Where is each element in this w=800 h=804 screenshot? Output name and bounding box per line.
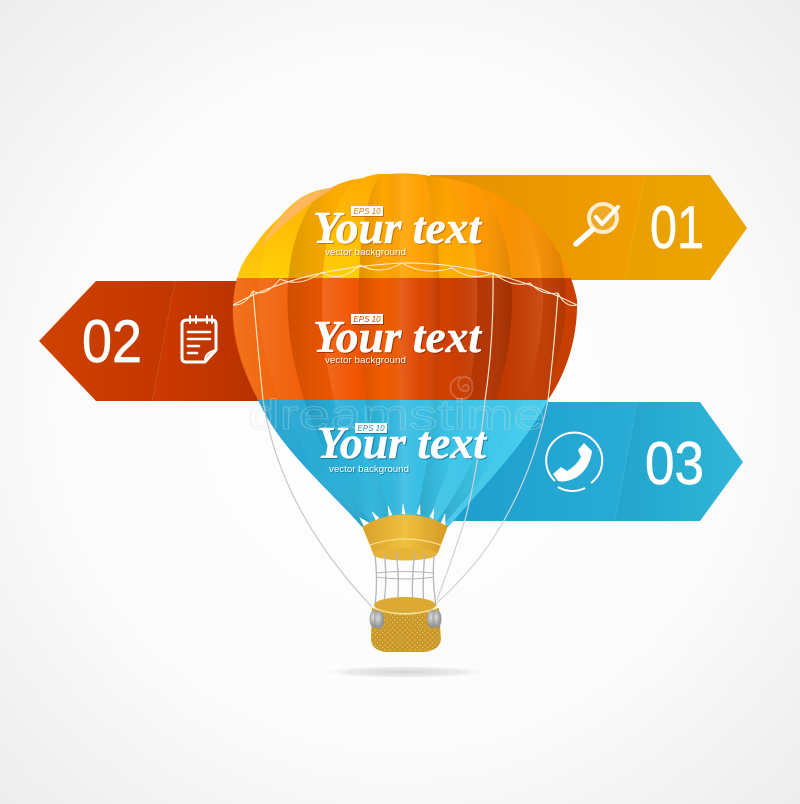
caption: vector background — [325, 355, 406, 366]
net arc — [233, 263, 577, 305]
ribbon 02 — [39, 281, 300, 401]
eps text: EPS 10 — [353, 315, 381, 324]
watermark — [248, 377, 545, 438]
sandbags left — [370, 610, 384, 629]
balloon net and ropes — [233, 263, 577, 607]
balloon orange band — [237, 173, 570, 278]
crown rays — [360, 504, 445, 526]
icon: phone in circle — [546, 433, 602, 491]
caption: vector background — [329, 464, 409, 475]
label 2 — [313, 312, 482, 366]
watermark spiral — [450, 377, 472, 399]
number 01: 01 — [650, 194, 704, 261]
your text heading: Your text — [317, 418, 488, 468]
basket — [371, 597, 441, 652]
crown band — [370, 539, 441, 545]
number 03: 03 — [645, 430, 704, 497]
crown skirt — [362, 514, 448, 558]
eps text: EPS 10 — [353, 207, 381, 216]
crown opening — [373, 548, 437, 560]
watermark wordmark: dreamstime — [248, 391, 545, 438]
centre right rope — [485, 273, 493, 400]
label 1 — [313, 203, 482, 258]
eps badge — [355, 423, 387, 433]
icon: notepad — [182, 316, 216, 362]
basket body — [371, 608, 441, 652]
your text heading: Your text — [313, 312, 482, 362]
basket rim edge — [373, 608, 438, 614]
net scallops — [233, 263, 577, 306]
your text heading: Your text — [313, 203, 482, 253]
eps badge — [351, 314, 383, 324]
hot air balloon envelope — [225, 165, 585, 530]
icon: magnifier with check — [576, 204, 618, 244]
ribbon 01 — [430, 175, 747, 280]
sandbags right — [427, 610, 442, 628]
basket ropes — [375, 552, 436, 610]
ribbon 03 — [420, 402, 743, 521]
bright and dark gores in red band — [359, 278, 512, 400]
label 3 — [317, 418, 488, 475]
ground shadow — [323, 666, 487, 678]
balloon gores — [232, 170, 566, 527]
eps text: EPS 10 — [357, 424, 385, 433]
basket rim — [374, 597, 436, 613]
yellow gores in orange band — [237, 174, 477, 278]
balloon blue band — [258, 400, 548, 527]
number 02: 02 — [82, 308, 142, 375]
left rope — [253, 291, 263, 400]
outer right rope — [548, 293, 558, 400]
caption: vector background — [325, 247, 406, 258]
gold crown — [360, 504, 448, 560]
eps badge — [351, 206, 383, 216]
balloon red band — [225, 278, 585, 400]
